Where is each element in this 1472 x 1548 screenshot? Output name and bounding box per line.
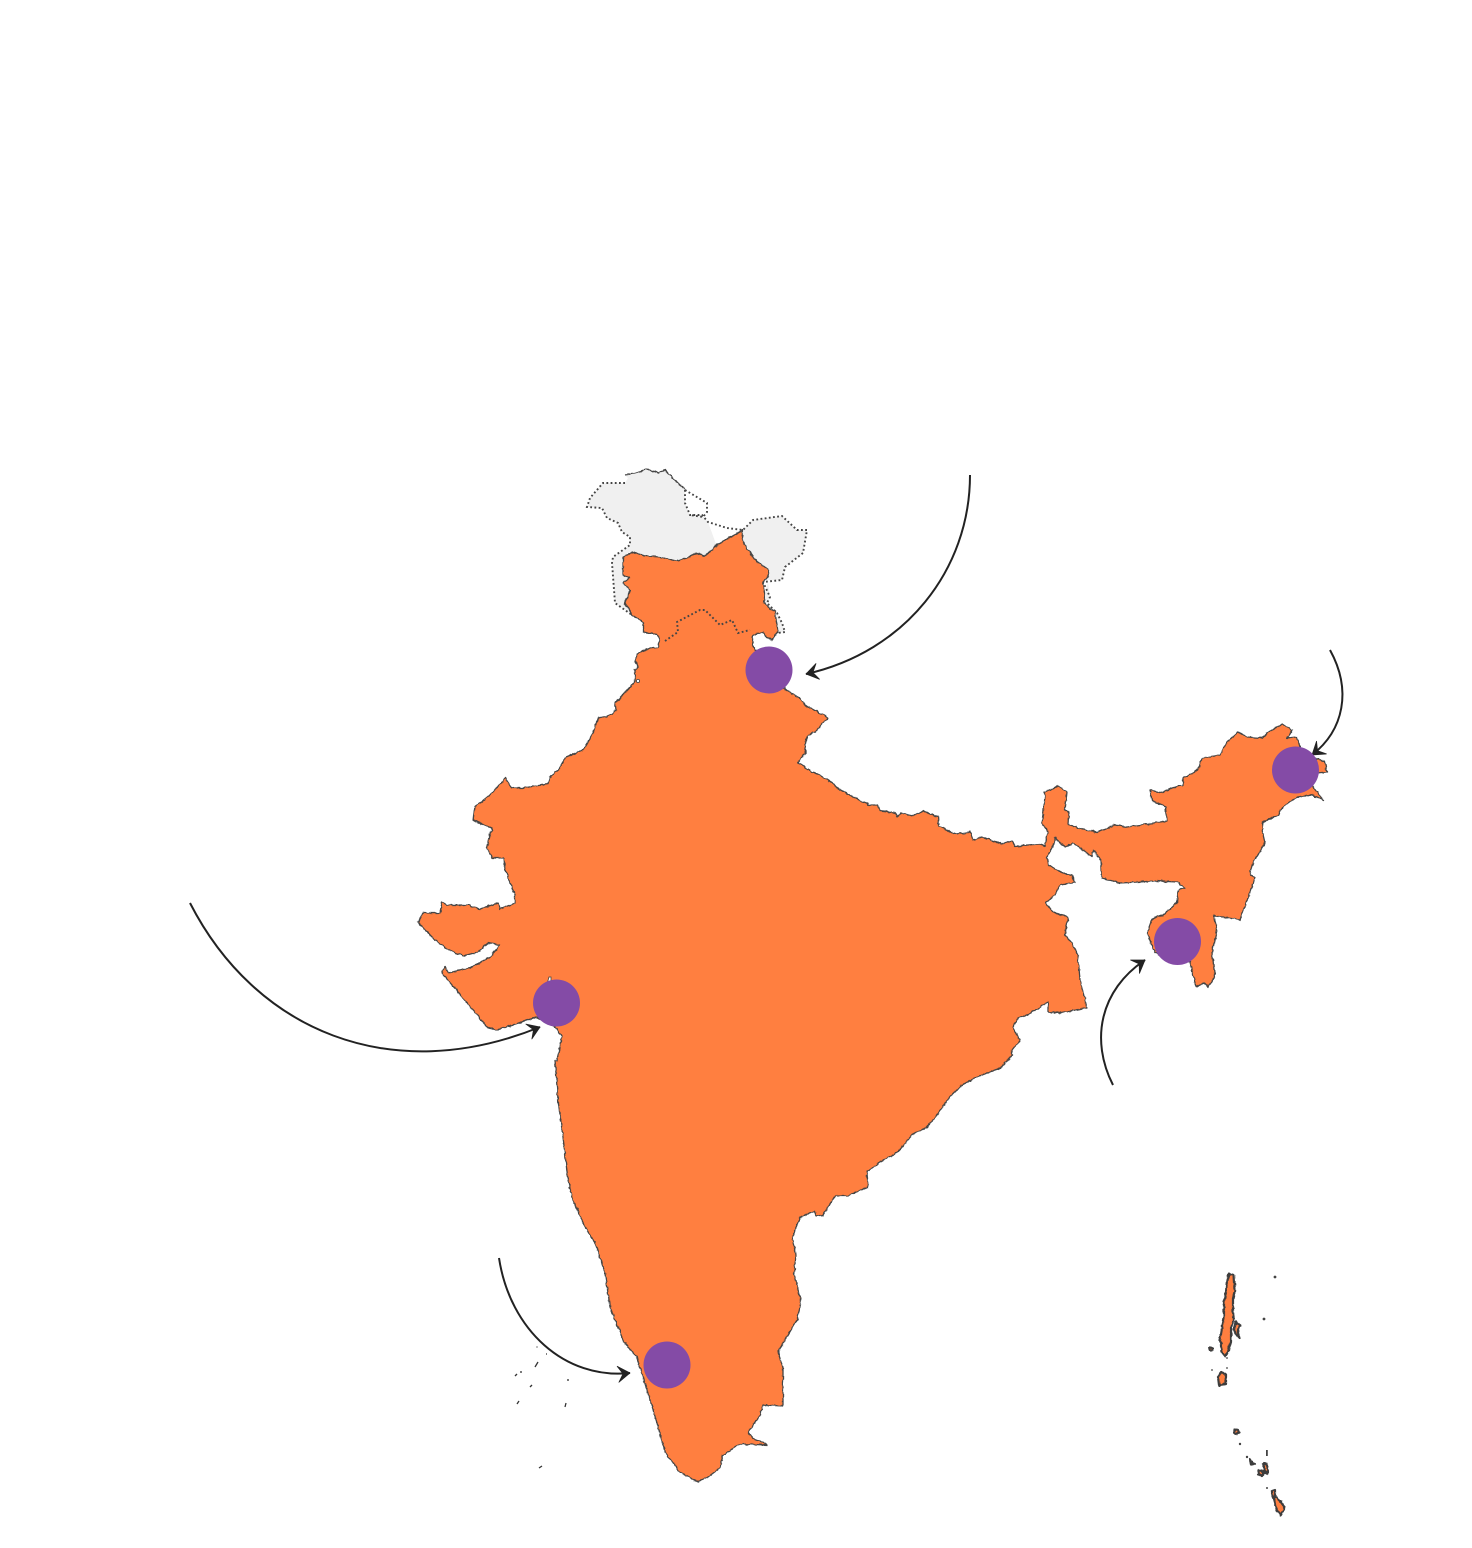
- arrow: to southern marker: [499, 1258, 630, 1374]
- inner boundary: dotted Punjab line: [665, 610, 750, 641]
- marker: southern location: [644, 1342, 690, 1388]
- marker: northern location: [746, 646, 792, 694]
- arrow: to eastern marker: [1101, 960, 1145, 1085]
- marker: north-eastern location: [1272, 746, 1319, 794]
- islands: Andaman and Nicobar: [1210, 1274, 1284, 1515]
- coastal details: small inlets: [547, 679, 640, 984]
- disputed territory: grey northern regions: [587, 469, 807, 633]
- marker: western location: [533, 980, 580, 1026]
- islands: Lakshadweep: [515, 1347, 569, 1468]
- map: India mainland and north-east: [418, 530, 1327, 1482]
- arrow: to northern marker: [806, 475, 970, 674]
- marker: eastern location: [1154, 918, 1201, 965]
- islands: small outlying dots: [1211, 1276, 1276, 1489]
- arrow: to north-eastern marker: [1312, 650, 1342, 755]
- arrow: to western marker: [190, 903, 540, 1051]
